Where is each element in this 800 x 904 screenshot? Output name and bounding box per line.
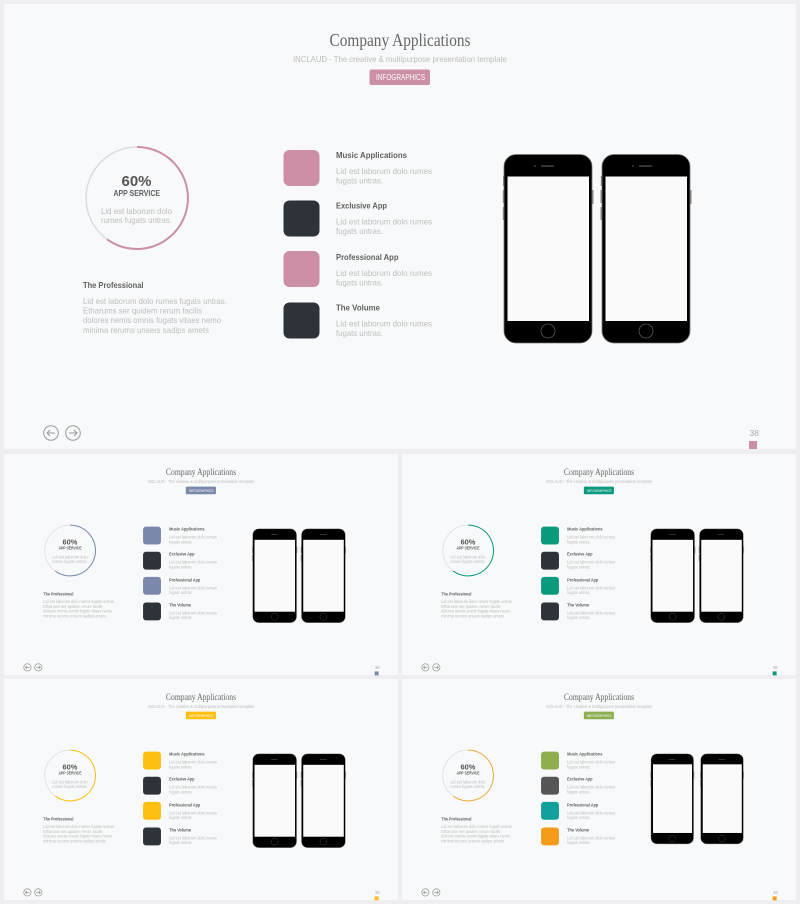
list item: music applications xyxy=(143,752,217,770)
page marker xyxy=(749,441,757,449)
ring text: Lid est laborum dolo xyxy=(52,554,88,559)
text block: the professional: minima rerums unsers sadips amets xyxy=(441,839,504,844)
badge xyxy=(584,712,614,719)
text block: the professional: Etharums ser quidem rerum facilis xyxy=(441,604,501,609)
text block: the professional xyxy=(43,591,115,619)
text block: the professional: minima rerums unsers sadips amets xyxy=(83,325,209,335)
text block: the professional: dolores nemis omnis fugats vitaes nemo xyxy=(83,315,221,325)
list item: exclusive app: Lid est laborum dolo rumes xyxy=(169,560,217,565)
list item: the volume: Lid est laborum dolo rumes xyxy=(169,610,217,615)
text block: the professional: minima rerums unsers sadips amets xyxy=(441,614,504,619)
text block: the professional xyxy=(441,591,513,619)
list item: exclusive app xyxy=(284,200,432,236)
page number: 38 xyxy=(773,665,778,670)
page marker xyxy=(773,896,777,900)
list item: exclusive app xyxy=(541,777,615,795)
list item: music applications: Lid est laborum dolo rumes xyxy=(169,535,217,540)
list item: professional app xyxy=(143,577,217,595)
text block: the professional: The Professional xyxy=(441,591,471,596)
ring text: rumes fugats untras. xyxy=(101,215,172,225)
ring text xyxy=(450,538,486,564)
list item: music applications: Lid est laborum dolo rumes xyxy=(169,760,217,765)
progress ring xyxy=(86,147,188,249)
list item: exclusive app: fugats untras. xyxy=(336,226,383,236)
ring text: rumes fugats untras. xyxy=(52,559,88,564)
text block: the professional: The Professional xyxy=(43,816,73,821)
ring text: rumes fugats untras. xyxy=(52,784,88,789)
ring text xyxy=(52,538,88,564)
list item: the volume: The Volume xyxy=(567,827,590,832)
list item: exclusive app: Exclusive App xyxy=(169,552,195,557)
badge: INFOGRAPHICS xyxy=(376,73,425,82)
list item: the volume: fugats untras. xyxy=(567,615,591,620)
list item: the volume: fugats untras. xyxy=(567,840,591,845)
phone right xyxy=(699,529,744,623)
list item: professional app xyxy=(143,802,217,820)
list item: music applications: Music Applications xyxy=(567,752,603,757)
list item: exclusive app: Lid est laborum dolo rumes xyxy=(169,785,217,790)
list item: professional app: fugats untras. xyxy=(567,815,591,820)
list item: the volume: Lid est laborum dolo rumes xyxy=(567,610,615,615)
text block: the professional: The Professional xyxy=(441,816,471,821)
arrow: next xyxy=(433,664,440,671)
arrow: next xyxy=(35,664,42,671)
list item: exclusive app xyxy=(143,552,217,570)
phone right xyxy=(600,154,692,343)
list item: exclusive app: Exclusive App xyxy=(567,552,593,557)
ring text xyxy=(450,763,486,789)
list item: the volume xyxy=(143,827,217,845)
subtitle: INCLAUD - The creative & multipurpose presentation template xyxy=(546,479,653,484)
list item: the volume xyxy=(541,827,615,845)
list item: exclusive app: Lid est laborum dolo rumes xyxy=(567,785,615,790)
list item: professional app xyxy=(541,802,615,820)
panel: yellow slide xyxy=(4,679,398,900)
title: Company Applications xyxy=(330,30,470,50)
list item: music applications: Lid est laborum dolo rumes xyxy=(567,760,615,765)
ring text: APP SERVICE xyxy=(114,188,160,198)
text block: the professional: dolores nemis omnis fugats vitaes nemo xyxy=(43,609,113,614)
panel: blue slide xyxy=(4,454,398,675)
text block: the professional: dolores nemis omnis fugats vitaes nemo xyxy=(441,834,511,839)
list item: professional app xyxy=(284,251,432,288)
progress ring xyxy=(443,750,494,801)
text block: the professional: dolores nemis omnis fugats vitaes nemo xyxy=(441,609,511,614)
text block: the professional: The Professional xyxy=(83,280,144,290)
ring text: Lid est laborum dolo xyxy=(450,779,486,784)
list item: professional app xyxy=(541,577,615,595)
list item: exclusive app xyxy=(143,777,217,795)
panel: teal slide xyxy=(402,454,796,675)
arrow: previous xyxy=(24,664,31,671)
subtitle: INCLAUD - The creative & multipurpose presentation template xyxy=(546,704,653,709)
phone left xyxy=(252,754,297,848)
ring text: 60% xyxy=(62,538,78,547)
title: Company Applications xyxy=(564,467,635,477)
ring text xyxy=(101,173,172,225)
ring text: rumes fugats untras. xyxy=(450,784,486,789)
ring text: APP SERVICE xyxy=(456,546,480,551)
list item: exclusive app: fugats untras. xyxy=(567,564,591,569)
text block: the professional: Etharums ser quidem rerum facilis xyxy=(83,306,202,316)
list item: professional app: Lid est laborum dolo rumes xyxy=(567,585,615,590)
list item: exclusive app: Exclusive App xyxy=(336,200,387,210)
panel: large pink slide xyxy=(4,4,796,449)
list item: music applications: Music Applications xyxy=(336,150,407,160)
page number: 38 xyxy=(750,428,759,438)
phone right xyxy=(301,754,346,848)
arrow: next xyxy=(433,889,440,896)
ring text: Lid est laborum dolo xyxy=(101,206,172,216)
arrow: previous xyxy=(422,889,429,896)
text block: the professional: Lid est laborum dolo rumes fugats untras. xyxy=(43,599,115,604)
list item: music applications: fugats untras. xyxy=(169,539,193,544)
subtitle: INCLAUD - The creative & multipurpose presentation template xyxy=(148,479,255,484)
badge xyxy=(584,487,614,494)
page marker xyxy=(773,671,777,675)
ring text: 60% xyxy=(122,173,152,190)
phone left xyxy=(252,529,297,623)
page number: 38 xyxy=(375,665,380,670)
list item: professional app: Professional App xyxy=(169,577,201,582)
text block: the professional: Lid est laborum dolo rumes fugats untras. xyxy=(43,824,115,829)
list item: professional app: Professional App xyxy=(567,802,599,807)
list item: music applications: fugats untras. xyxy=(567,764,591,769)
title: Company Applications xyxy=(166,692,237,702)
list item: the volume: fugats untras. xyxy=(169,615,193,620)
panel: multicolour slide xyxy=(402,679,796,900)
list item: exclusive app: Lid est laborum dolo rumes xyxy=(567,560,615,565)
list item: professional app: Professional App xyxy=(169,802,201,807)
text block: the professional: minima rerums unsers sadips amets xyxy=(43,614,106,619)
list item: professional app: Lid est laborum dolo rumes xyxy=(169,585,217,590)
badge xyxy=(186,487,216,494)
ring text: APP SERVICE xyxy=(58,771,82,776)
list item: exclusive app: fugats untras. xyxy=(169,789,193,794)
list item: exclusive app: fugats untras. xyxy=(567,789,591,794)
phone right xyxy=(301,529,346,623)
list item: music applications: Music Applications xyxy=(169,752,205,757)
list item: professional app: Lid est laborum dolo rumes xyxy=(336,268,432,278)
arrow: previous xyxy=(44,426,58,440)
title: Company Applications xyxy=(564,692,635,702)
ring text xyxy=(52,763,88,789)
list item: the volume: The Volume xyxy=(169,602,192,607)
list item: the volume: The Volume xyxy=(567,602,590,607)
badge xyxy=(370,70,430,85)
list item: exclusive app: Exclusive App xyxy=(169,777,195,782)
text block: the professional: The Professional xyxy=(43,591,73,596)
page number: 38 xyxy=(773,890,778,895)
list item: music applications: Music Applications xyxy=(169,527,205,532)
list item: music applications xyxy=(541,752,615,770)
list item: music applications: Music Applications xyxy=(567,527,603,532)
list item: professional app: Professional App xyxy=(336,252,398,262)
list item: the volume: Lid est laborum dolo rumes xyxy=(336,318,432,328)
phone left xyxy=(503,154,594,343)
list item: exclusive app: Lid est laborum dolo rumes xyxy=(336,216,432,226)
progress ring xyxy=(45,525,96,576)
page marker xyxy=(375,896,379,900)
list item: music applications xyxy=(143,527,217,545)
text block: the professional: Etharums ser quidem rerum facilis xyxy=(441,829,501,834)
badge: INFOGRAPHICS xyxy=(587,713,612,718)
list item: professional app: Professional App xyxy=(567,577,599,582)
subtitle: INCLAUD - The creative & multipurpose presentation template xyxy=(293,54,507,64)
page number: 38 xyxy=(375,890,380,895)
ring text: APP SERVICE xyxy=(456,771,480,776)
list item: music applications xyxy=(541,527,615,545)
ring text: 60% xyxy=(460,538,476,547)
list item: professional app: fugats untras. xyxy=(336,278,383,288)
text block: the professional: Lid est laborum dolo rumes fugats untras. xyxy=(441,599,513,604)
list item: the volume xyxy=(284,302,432,338)
phone right xyxy=(700,754,744,844)
list item: the volume: The Volume xyxy=(336,302,380,312)
ring text: 60% xyxy=(62,763,78,772)
list item: music applications: fugats untras. xyxy=(567,539,591,544)
list item: exclusive app xyxy=(541,552,615,570)
text block: the professional: minima rerums unsers sadips amets xyxy=(43,839,106,844)
list item: professional app: fugats untras. xyxy=(169,590,193,595)
progress ring xyxy=(45,750,96,801)
list item: professional app: Lid est laborum dolo rumes xyxy=(169,810,217,815)
ring text: Lid est laborum dolo xyxy=(450,554,486,559)
text block: the professional xyxy=(83,280,227,335)
text block: the professional: dolores nemis omnis fugats vitaes nemo xyxy=(43,834,113,839)
list item: music applications xyxy=(284,150,432,186)
ring text: Lid est laborum dolo xyxy=(52,779,88,784)
page marker xyxy=(375,671,379,675)
badge: INFOGRAPHICS xyxy=(189,713,214,718)
list item: music applications: fugats untras. xyxy=(336,176,383,186)
arrow: next xyxy=(35,889,42,896)
progress ring xyxy=(443,525,494,576)
list item: the volume: The Volume xyxy=(169,827,192,832)
arrow: next xyxy=(66,426,80,440)
subtitle: INCLAUD - The creative & multipurpose presentation template xyxy=(148,704,255,709)
list item: the volume: Lid est laborum dolo rumes xyxy=(567,835,615,840)
ring text: 60% xyxy=(460,763,476,772)
ring text: APP SERVICE xyxy=(58,546,82,551)
ring text: rumes fugats untras. xyxy=(450,559,486,564)
list item: the volume: Lid est laborum dolo rumes xyxy=(169,835,217,840)
list item: professional app: Lid est laborum dolo rumes xyxy=(567,810,615,815)
badge: INFOGRAPHICS xyxy=(587,488,612,493)
arrow: previous xyxy=(24,889,31,896)
text block: the professional xyxy=(43,816,115,844)
text block: the professional: Lid est laborum dolo rumes fugats untras. xyxy=(441,824,513,829)
list item: the volume xyxy=(541,602,615,620)
list item: music applications: Lid est laborum dolo rumes xyxy=(336,166,432,176)
text block: the professional: Etharums ser quidem rerum facilis xyxy=(43,604,103,609)
list item: the volume: fugats untras. xyxy=(336,328,383,338)
list item: professional app: fugats untras. xyxy=(567,590,591,595)
list item: exclusive app: fugats untras. xyxy=(169,564,193,569)
list item: professional app: fugats untras. xyxy=(169,815,193,820)
list item: exclusive app: Exclusive App xyxy=(567,777,593,782)
badge: INFOGRAPHICS xyxy=(189,488,214,493)
phone left xyxy=(650,529,695,623)
list item: music applications: fugats untras. xyxy=(169,764,193,769)
arrow: previous xyxy=(422,664,429,671)
phone left xyxy=(650,754,694,844)
text block: the professional: Etharums ser quidem rerum facilis xyxy=(43,829,103,834)
list item: music applications: Lid est laborum dolo rumes xyxy=(567,535,615,540)
badge xyxy=(186,712,216,719)
title: Company Applications xyxy=(166,467,237,477)
text block: the professional: Lid est laborum dolo rumes fugats untras. xyxy=(83,296,227,306)
text block: the professional xyxy=(441,816,513,844)
list item: the volume: fugats untras. xyxy=(169,840,193,845)
list item: the volume xyxy=(143,602,217,620)
